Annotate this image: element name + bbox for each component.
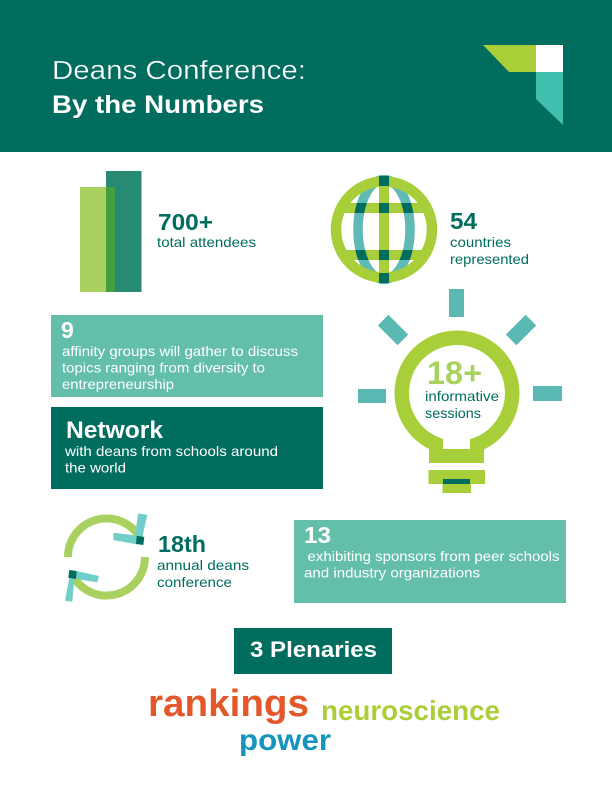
panel: network [51, 407, 323, 489]
icon: globe [336, 176, 432, 283]
plenary topics: rankings [148, 683, 309, 725]
panel: exhibiting sponsors: 13 [304, 522, 331, 548]
panel: exhibiting sponsors [294, 520, 566, 603]
text: 18+ informative sessions: sessions [425, 405, 481, 421]
text: 700+ total attendees [157, 209, 256, 250]
panel: affinity groups [51, 315, 323, 397]
title: By the Numbers [52, 91, 264, 119]
icon: light bulb [358, 289, 562, 493]
text: 18th annual deans conference: conference [157, 574, 232, 590]
text: 18+ informative sessions [425, 355, 499, 421]
panel: network: with deans from schools around [64, 443, 278, 459]
header band [0, 0, 612, 152]
icon: bulb rays [358, 289, 562, 403]
icon: logo [483, 45, 563, 125]
panel: affinity groups: entrepreneurship [62, 376, 174, 392]
panel: exhibiting sponsors: and industry organizations [304, 564, 480, 580]
stat: attendees [80, 171, 256, 292]
plenary topics: neuroscience [321, 695, 500, 726]
text: 18+ informative sessions: 18+ [427, 355, 482, 391]
icon: bars [80, 171, 142, 292]
text: 700+ total attendees: total attendees [157, 234, 256, 250]
text: 54 countries represented: 54 [450, 208, 477, 234]
text: 54 countries represented: countries [450, 234, 511, 250]
title: Deans Conference: [52, 57, 306, 85]
panel: exhibiting sponsors: exhibiting sponsors from peer schools [308, 548, 560, 564]
plenary topics [148, 683, 500, 757]
text: 18th annual deans conference: 18th [158, 531, 206, 557]
panel: affinity groups: topics ranging from diversity to [62, 360, 265, 376]
text: 700+ total attendees: 700+ [158, 209, 213, 235]
panel: 3 plenaries heading [234, 628, 392, 674]
panel: 3 plenaries heading: 3 Plenaries [250, 637, 377, 662]
text: 54 countries represented [450, 208, 529, 267]
text: 18th annual deans conference: annual deans [157, 557, 249, 573]
stat: countries [336, 176, 529, 283]
title [52, 57, 306, 119]
stat: annual conference [65, 513, 249, 602]
panel: affinity groups: affinity groups will gather to discuss [62, 343, 298, 359]
stat: sessions [358, 289, 562, 493]
panel: network: the world [65, 460, 126, 476]
icon: cycle arrows [65, 513, 147, 602]
text: 18+ informative sessions: informative [425, 388, 499, 404]
text: 18th annual deans conference [157, 531, 249, 590]
panel: affinity groups: 9 [61, 317, 74, 343]
plenary topics: power [239, 724, 331, 757]
text: 54 countries represented: represented [450, 251, 529, 267]
panel: network: Network [66, 417, 164, 444]
